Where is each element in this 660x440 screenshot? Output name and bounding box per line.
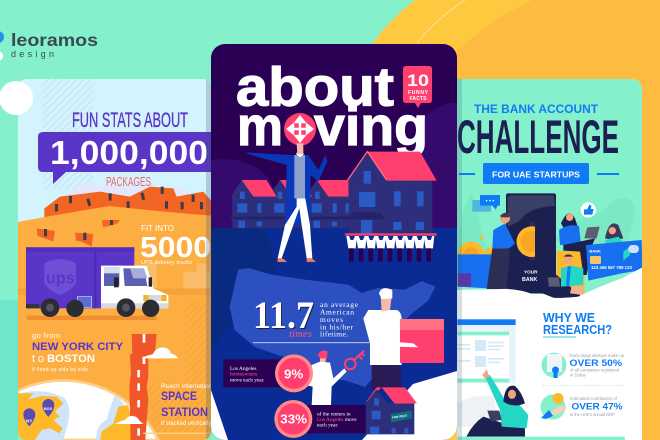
badge: 10 funny facts: [403, 66, 432, 108]
title: moving: m: [237, 95, 283, 157]
callout: homeowners 9%: [223, 354, 313, 392]
title: moving: o: [286, 103, 315, 156]
stat: fit into 5000: FIT INTO: [141, 224, 174, 233]
logo: design: [11, 49, 54, 59]
heading: the bank account: THE BANK ACCOUNT: [474, 104, 598, 116]
stat: over 47%: OVER 47%: [572, 402, 623, 412]
badge: 10 funny facts: FUNNY: [408, 90, 429, 96]
stat: new york to boston: [32, 331, 124, 373]
stat: 11.7 times: times: [289, 329, 312, 340]
icon: moving arrows circle: [284, 113, 316, 145]
stat: new york to boston: NEW YORK CITY: [32, 341, 124, 353]
text: your bank: BANK: [522, 277, 538, 283]
illustration: delivery truck scene: [17, 220, 214, 440]
stat: over 50%: OVER 50%: [570, 358, 623, 369]
stat: space station: Reach International: [161, 383, 218, 390]
subheading: packages: PACKAGES: [106, 174, 151, 189]
title: about: about: [236, 56, 394, 118]
stat: new york to boston: to: [32, 353, 44, 365]
heading: why we research: RESEARCH?: [543, 322, 612, 337]
stat: 11.7 times: 11.7: [253, 294, 314, 337]
text: american moves description: [320, 300, 359, 338]
illustration: woman with laptop: [557, 202, 600, 294]
illustration: man pointing: [246, 143, 327, 262]
callout: renters 33%: each year.: [317, 423, 338, 429]
callout: renters 33%: Los Angeles move: [317, 417, 357, 423]
illustration: woman with card: [586, 223, 642, 281]
callout: renters 33%: of the renters in: [317, 410, 351, 417]
stat: over 47%: to the UAE's annual GDP: [570, 412, 615, 417]
illustration: delivery truck scene: NY: [26, 419, 33, 424]
panel: fun stats about packages: [17, 79, 218, 440]
badge: 10 funny facts: FACTS: [410, 96, 427, 102]
illustration: house for rent: FOR RENT: [392, 414, 408, 420]
panel: about moving: [211, 44, 457, 440]
text: american moves description: lifetime.: [320, 330, 348, 338]
stat: new york to boston: go from: [32, 331, 60, 340]
illustration: woman with card: BANK: [589, 249, 601, 254]
illustration: house for rent: [365, 387, 417, 434]
illustration: phone with your bank: [506, 193, 556, 293]
illustration: bank account team: [453, 193, 645, 305]
illustration: orange hill: [18, 206, 215, 440]
illustration: man standing: [487, 213, 515, 289]
heading: why we research: [543, 313, 612, 338]
stat: over 47%: [540, 393, 623, 420]
illustration: man with laptop: [538, 254, 583, 298]
stat: new york to boston: BOSTON: [47, 353, 95, 365]
button: for uae startups: FOR UAE STARTUPS: [492, 170, 580, 180]
text: your bank: YOUR: [524, 270, 538, 275]
text: american moves description: moves: [320, 315, 343, 324]
illustration: woman with laptop: [467, 369, 528, 437]
stat: 11.7 times: 11.7: [254, 295, 315, 338]
stat: fit into 5000: UPS delivery trucks: [141, 260, 192, 266]
text: american moves description: in his/her: [320, 322, 354, 332]
logo: [0, 30, 98, 61]
text: american moves description: American: [320, 308, 354, 316]
stat: over 47%: Estimated contribution of: [570, 396, 618, 401]
heading: why we research: WHY WE: [543, 310, 595, 325]
title: moving: [240, 106, 425, 154]
stat: over 50%: [542, 352, 625, 378]
illustration: research lower half: [457, 319, 625, 440]
illustration: movers carrying house: [346, 236, 434, 262]
badge: 10 funny facts: 10: [407, 71, 429, 90]
stat: space station: SPACE: [161, 389, 197, 403]
panel: bank account challenge: [453, 79, 645, 440]
heading: fun stats about: FUN STATS ABOUT: [72, 109, 188, 132]
illustration: large house: [347, 152, 437, 234]
stat: new york to boston: if lined up side by side: [32, 367, 88, 373]
callout: 1,000,000 bubble: 1,000,000: [50, 134, 208, 171]
callout: homeowners 9%: Los Angeles: [230, 366, 256, 372]
stat: over 50%: of all companies registered: [570, 368, 620, 372]
callout: 1,000,000 bubble: [38, 132, 215, 184]
callout: renters 33%: 33%: [280, 413, 307, 427]
white wave divider: [457, 268, 642, 298]
stat: over 50%: Early-stage startups make up: [570, 353, 625, 358]
illustration: delivery truck scene: BOS: [44, 407, 52, 411]
stat: fit into 5000: 5000: [140, 232, 211, 264]
callout: homeowners 9%: 9%: [284, 366, 303, 381]
illustration: delivery truck scene: ups: [46, 268, 75, 287]
illustration: man holding box: [363, 288, 444, 390]
callout: homeowners 9%: move each year.: [230, 378, 264, 384]
illustration: movers and figures: [223, 233, 444, 438]
stat: over 50%: in Dubai: [570, 372, 586, 378]
illustration: woman with card: 123 456 567 789 123: [591, 265, 632, 270]
illustration: woman holding key: [305, 351, 364, 405]
text: american moves description: an average: [320, 300, 359, 309]
title: moving: ving: [314, 95, 428, 157]
text: your bank: [522, 270, 538, 281]
illustration: houses: [230, 152, 437, 234]
illustration: usa map: [230, 268, 435, 387]
illustration: coins and blue box: [458, 242, 498, 288]
stat: space station: [161, 384, 211, 426]
decorative white circle: [0, 81, 33, 115]
button: for uae startups: [459, 163, 619, 184]
illustration: bank account team: • • •: [486, 199, 494, 205]
logo: leoramos: [11, 30, 98, 50]
illustration: pile of boxes: [44, 185, 211, 218]
illustration: row of houses: [230, 180, 352, 228]
callout: homeowners 9%: homeowners: [230, 372, 257, 378]
illustration: browser panel: [457, 319, 516, 383]
stat: fit into 5000: [140, 224, 211, 266]
callout: renters 33%: [274, 400, 370, 438]
stat: space station: STATION: [161, 405, 208, 419]
stat: space station: if stacked vertically: [161, 421, 211, 427]
